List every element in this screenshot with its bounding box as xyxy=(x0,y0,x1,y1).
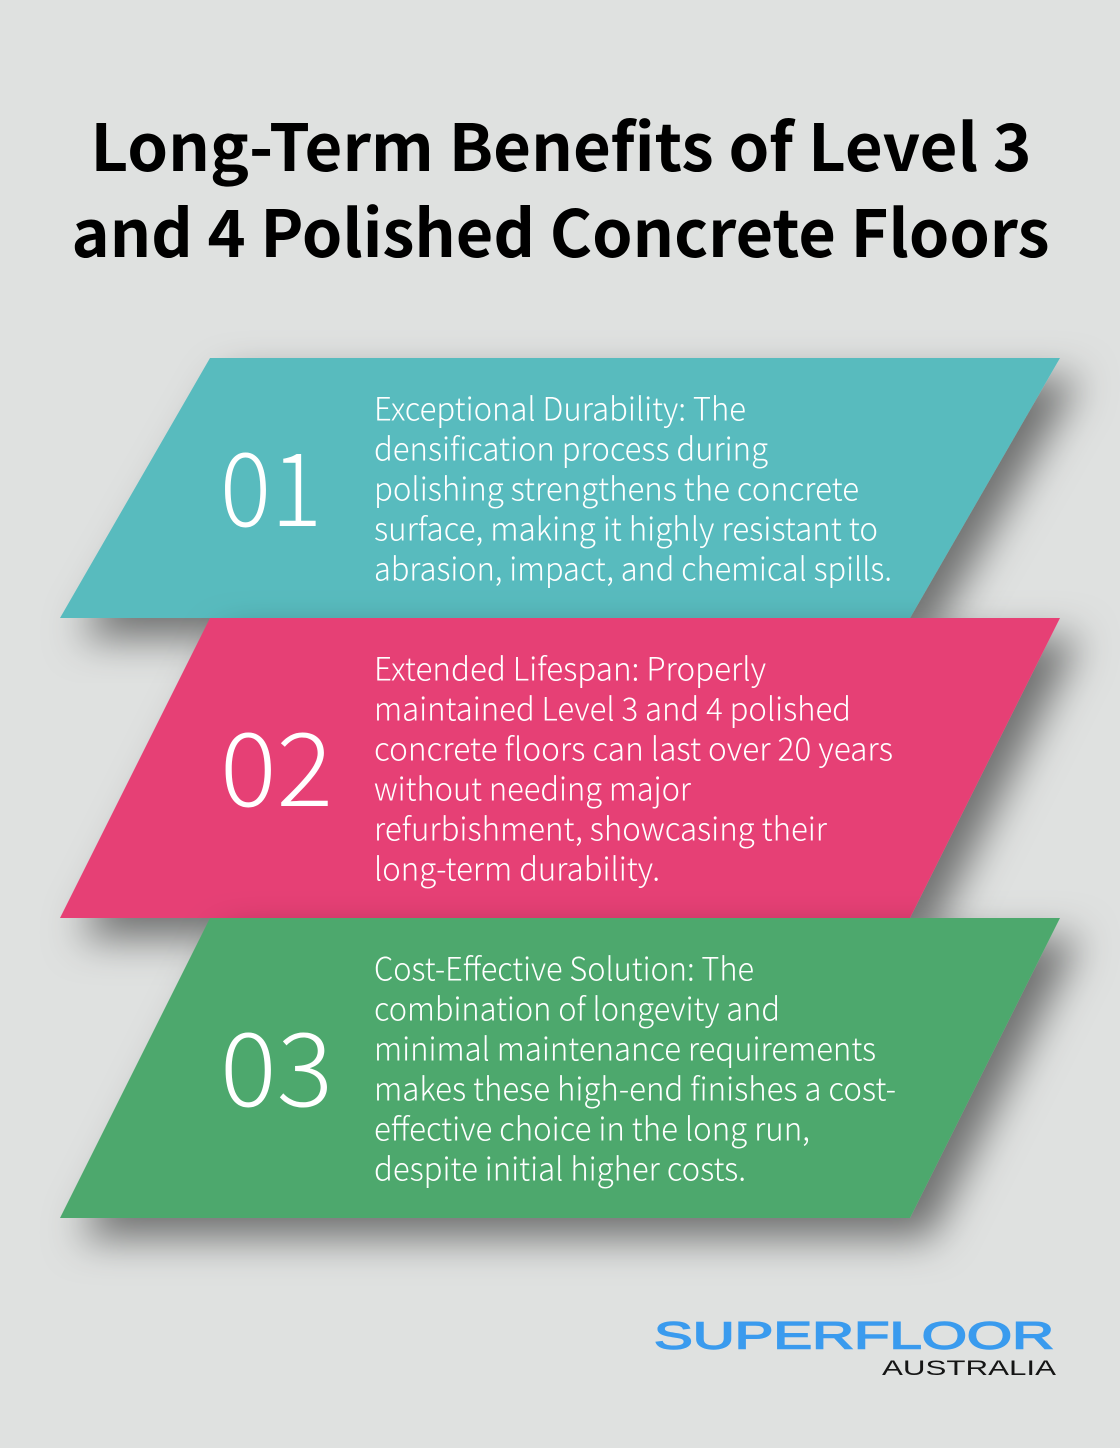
text: durability: polishing strengthens the concrete xyxy=(374,464,859,510)
text: durability: surface, making it highly resistant to xyxy=(374,504,878,550)
title: and 4 Polished Concrete Floors xyxy=(72,182,1050,276)
panel: 03 cost-effective solution xyxy=(60,918,1060,1218)
pink parallelogram xyxy=(60,618,1060,918)
text: lifespan xyxy=(374,644,893,890)
logo: Superfloor Australia: AUSTRALIA xyxy=(882,1357,1056,1380)
panel: 01 exceptional durability xyxy=(60,358,1060,618)
number 03: 03 xyxy=(220,989,333,1136)
text: durability xyxy=(374,384,892,590)
text: cost: minimal maintenance requirements xyxy=(374,1024,876,1070)
text: durability: Exceptional Durability: The xyxy=(374,384,746,430)
number 01: 01 xyxy=(220,409,322,556)
text: lifespan: concrete floors can last over 20 years xyxy=(374,724,893,770)
text: lifespan: without needing major xyxy=(374,764,691,810)
text: lifespan: long-term durability. xyxy=(374,844,660,890)
teal parallelogram xyxy=(60,358,1060,618)
number 02: 02 xyxy=(220,689,333,836)
text: cost: Cost-Effective Solution: The xyxy=(374,944,754,990)
logo: Superfloor Australia xyxy=(654,1316,1056,1380)
title: Long-Term Benefits of Level 3 xyxy=(90,96,1032,190)
text: cost: effective choice in the long run, xyxy=(374,1104,810,1150)
text: lifespan: maintained Level 3 and 4 polished xyxy=(374,684,851,730)
text: cost xyxy=(374,944,896,1190)
text: lifespan: refurbishment, showcasing their xyxy=(374,804,827,850)
text: durability: abrasion, impact, and chemical spills. xyxy=(374,544,892,590)
panel: 02 extended lifespan xyxy=(60,618,1060,918)
text: cost: makes these high-end finishes a cost- xyxy=(374,1064,896,1110)
title xyxy=(72,96,1050,276)
text: durability: densification process during xyxy=(374,424,768,470)
text: cost: despite initial higher costs. xyxy=(374,1144,746,1190)
text: cost: combination of longevity and xyxy=(374,984,780,1030)
text: lifespan: Extended Lifespan: Properly xyxy=(374,644,766,690)
logo: Superfloor Australia: SUPERFLOOR xyxy=(654,1316,1054,1358)
green parallelogram xyxy=(60,918,1060,1218)
